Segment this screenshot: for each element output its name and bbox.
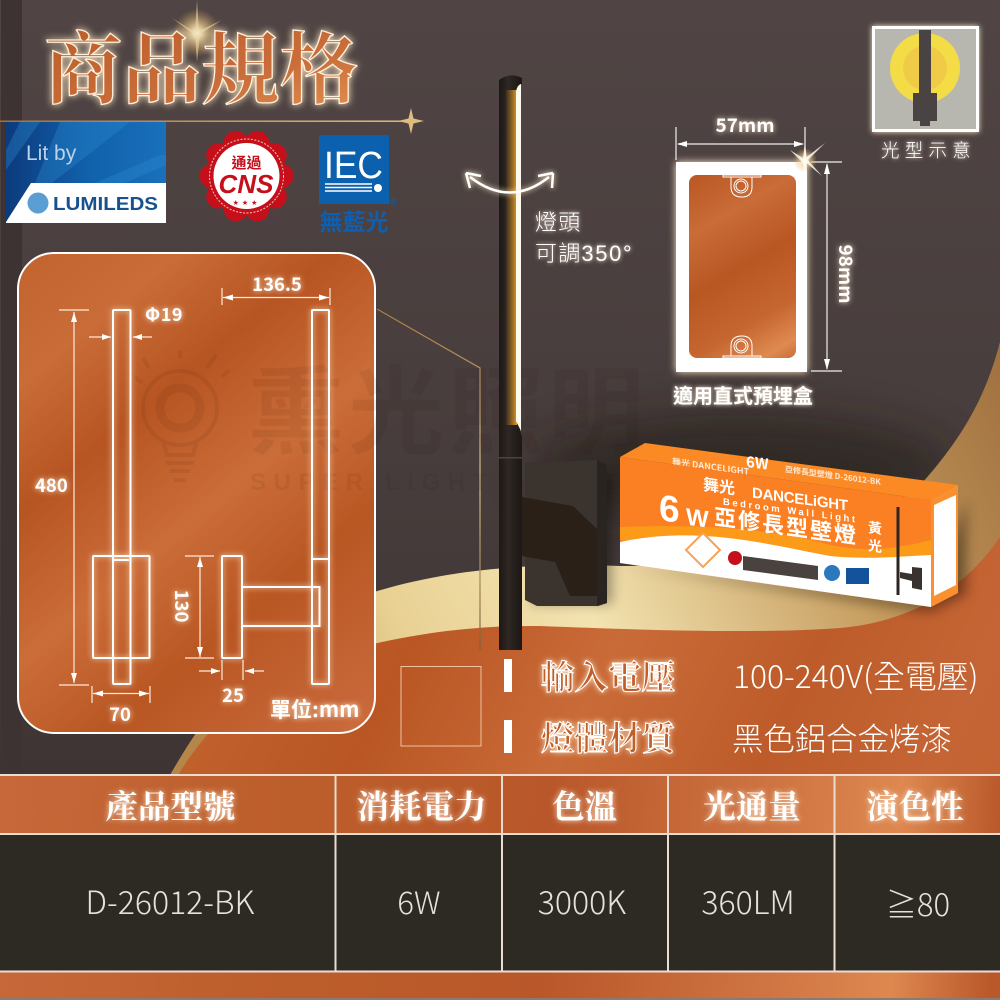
light pattern icon <box>874 28 978 130</box>
logo: lumileds <box>5 122 166 223</box>
box front text: 黃 <box>868 517 882 539</box>
box top text <box>672 441 881 496</box>
plate height dimension 130 <box>169 556 214 658</box>
spec table <box>0 775 1000 1000</box>
table values: 360LM <box>701 878 795 924</box>
rotation arrows <box>466 173 553 192</box>
table headers: 色溫 <box>552 789 617 826</box>
watermark bulb icon <box>135 350 229 480</box>
IEC letters: IEC <box>324 145 383 187</box>
spec marker <box>504 659 512 692</box>
width dimension: 57mm <box>715 111 775 138</box>
logo: CNS badge <box>200 131 294 221</box>
table bottom strip <box>0 972 1000 998</box>
depth dimension 136.5 <box>222 271 330 305</box>
table headers: 產品型號 <box>105 789 236 826</box>
watermark name: 熏光照明 <box>248 335 648 474</box>
product: wall lamp <box>499 75 612 650</box>
box front text: Bedroom Wall Light <box>723 497 856 526</box>
no blue light text: 無藍光 <box>320 203 388 237</box>
table values: 6W <box>397 878 441 923</box>
height dimension <box>811 162 860 371</box>
box front text: DANCELiGHT <box>752 485 849 515</box>
box top text: 6W <box>746 451 769 475</box>
box top text: 舞光 DANCELIGHT <box>672 455 750 478</box>
spec row: input voltage <box>504 652 979 698</box>
box front text: 亞修長型壁燈 <box>714 500 858 551</box>
lamp light strip <box>505 84 521 431</box>
embedded box diagram <box>673 111 860 409</box>
lit by text: Lit by <box>26 142 77 165</box>
logo: IEC <box>319 135 397 237</box>
title sparkle <box>172 0 222 62</box>
unit label: 單位:mm <box>270 694 359 724</box>
height dimension 480: 480 <box>35 472 68 498</box>
rotation label <box>535 205 633 268</box>
box top text: 亞修長型壁燈 D-26012-BK <box>785 464 881 488</box>
table values: D-26012-BK <box>86 878 255 924</box>
watermark english: SUPER LIGHT STORE <box>250 469 629 496</box>
box front text <box>659 465 882 558</box>
CNS word: CNS <box>219 169 274 199</box>
rotation label: 可調350° <box>535 236 633 268</box>
outline square placeholder <box>401 666 481 746</box>
spec label: 燈體材質 <box>540 721 678 758</box>
box front face <box>620 457 931 607</box>
top screw tab <box>723 175 761 197</box>
spec marker <box>504 720 512 753</box>
box front text: 6 <box>659 486 680 531</box>
panel: dimension drawing <box>35 271 359 727</box>
spec label: 輸入電壓 <box>541 660 675 697</box>
depth dimension 136.5: 136.5 <box>252 271 302 297</box>
IEC lines <box>325 184 372 191</box>
sparkle <box>790 142 825 176</box>
watermark <box>135 335 648 496</box>
title text: 商品規格 <box>44 27 358 114</box>
table header row <box>0 776 1000 833</box>
box front text: 舞光 <box>703 471 735 499</box>
box frame <box>676 162 807 372</box>
light pattern label: 光型示意 <box>881 137 976 163</box>
CNS stars: ★★★ <box>233 199 260 207</box>
table headers: 演色性 <box>866 789 964 826</box>
front view lamp <box>93 310 150 684</box>
box side face <box>931 485 958 607</box>
product box <box>620 441 966 612</box>
table values <box>86 878 950 925</box>
title underline <box>0 108 424 134</box>
box top face <box>620 443 958 500</box>
box badges <box>686 533 720 567</box>
plate height dimension 130: 130 <box>169 590 195 622</box>
diameter dimension <box>89 301 183 340</box>
diameter dimension: Φ19 <box>145 301 183 327</box>
table headers: 光通量 <box>703 789 801 826</box>
table headers <box>105 789 964 826</box>
box caption: 適用直式預埋盒 <box>673 380 813 409</box>
box front text: 光 <box>868 535 882 557</box>
width dimension 70: 70 <box>109 701 131 727</box>
panel: dimension drawing background <box>18 253 375 733</box>
plate thickness dimension 25: 25 <box>222 682 244 708</box>
height dimension: 98mm <box>833 244 860 304</box>
spec value: 100-240V(全電壓) <box>733 652 979 698</box>
side view lamp <box>222 310 329 684</box>
box opening <box>689 175 796 358</box>
CNS top text: 通過 <box>231 152 262 173</box>
bottom screw tab <box>723 336 761 358</box>
height dimension 480 <box>35 310 89 685</box>
mounting plate <box>522 460 612 606</box>
spec row: body material <box>504 715 952 760</box>
plate thickness dimension 25 <box>199 660 264 708</box>
table body row <box>0 835 1000 970</box>
lamp bar <box>499 75 522 650</box>
spec value: 黑色鋁合金烤漆 <box>732 715 952 760</box>
lumileds word: LUMILEDS <box>53 193 158 214</box>
width dimension <box>676 111 805 160</box>
table values: 3000K <box>538 878 626 924</box>
rotation label: 燈頭 <box>535 205 581 237</box>
title <box>44 0 358 114</box>
box lamp image <box>896 507 900 595</box>
box front text: W <box>686 504 709 534</box>
registered mark: ® <box>389 196 397 208</box>
width dimension 70 <box>92 686 150 727</box>
gold guide line <box>377 309 480 650</box>
lumileds globe <box>28 192 48 214</box>
table values: ≧80 <box>886 880 950 925</box>
table headers: 消耗電力 <box>356 789 487 826</box>
